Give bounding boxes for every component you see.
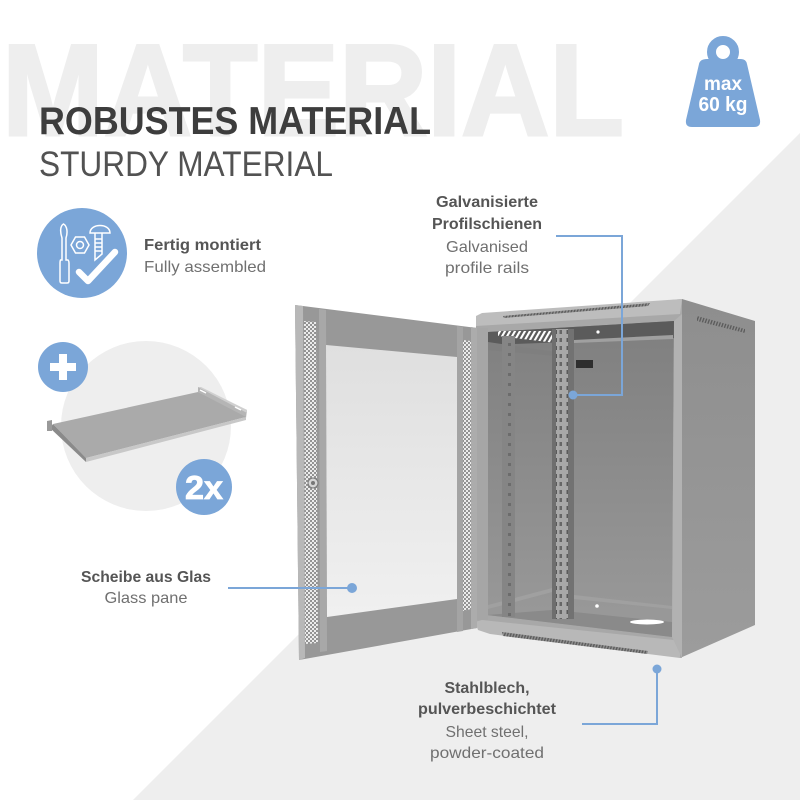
glass pane	[326, 345, 457, 617]
icon: weight max 60 kg	[686, 40, 760, 127]
icon: screwdriver	[60, 224, 69, 283]
background diagonal	[133, 133, 800, 800]
callout: profile rails	[432, 194, 622, 400]
heading english: STURDY MATERIAL	[39, 145, 333, 184]
callout: glass pane	[81, 569, 357, 607]
cabinet photo	[295, 299, 755, 660]
icon: weight max 60 kg: max	[704, 74, 742, 95]
cabinet front frame	[476, 299, 682, 658]
heading german: ROBUSTES MATERIAL	[39, 100, 431, 143]
backdrop circle	[61, 341, 231, 511]
cable clip	[576, 360, 593, 368]
callout text: Sheet steel,	[446, 724, 528, 741]
floor cut-out	[630, 620, 664, 624]
icon: weight max 60 kg: 60 kg	[698, 94, 748, 116]
bottom cap	[475, 620, 680, 658]
rear ventilation slots	[498, 331, 556, 343]
door	[295, 305, 488, 660]
callout line	[228, 587, 352, 589]
cabinet side panel	[680, 299, 755, 658]
callout text: Glass pane	[104, 590, 188, 607]
door lock	[308, 478, 318, 488]
icon: fully assembled tools	[37, 208, 127, 298]
left perforation	[304, 321, 318, 644]
callout: sheet steel	[418, 664, 662, 762]
callout text	[432, 194, 542, 277]
callout text: Galvanisierte	[436, 194, 538, 211]
badge: 2x	[176, 459, 232, 515]
callout text: profile rails	[445, 260, 529, 277]
mounting holes	[595, 330, 600, 608]
callout text	[81, 569, 211, 607]
callout text: Scheibe aus Glas	[81, 569, 211, 586]
icon: plus badge	[38, 342, 88, 392]
side vent	[697, 316, 745, 333]
shelf accessory panel	[38, 341, 247, 515]
watermark word: MATERIAL	[2, 17, 624, 163]
interior top band	[488, 321, 674, 345]
text: fully assembled: Fertig montiert	[144, 237, 262, 254]
right perforation	[463, 340, 471, 611]
callout dot	[568, 390, 578, 400]
callout text: pulverbeschichtet	[418, 701, 557, 718]
callout dot	[652, 664, 662, 674]
callout text: Galvanised	[446, 239, 528, 256]
front frame right post	[672, 314, 682, 658]
icon: screw	[90, 226, 110, 260]
callout dot	[347, 583, 357, 593]
callout line	[582, 669, 657, 724]
title	[39, 100, 431, 184]
text: fully assembled: Fully assembled	[144, 259, 266, 276]
shelf drawing	[47, 387, 247, 462]
door hinge strip	[477, 328, 488, 620]
callout line	[556, 236, 622, 395]
top cap	[476, 299, 682, 326]
icon: nut	[71, 237, 89, 253]
callout text: Stahlblech,	[444, 680, 530, 697]
cabinet interior back wall	[487, 321, 674, 637]
interior floor	[487, 610, 672, 637]
callout text: Profilschienen	[432, 216, 542, 233]
rear rail	[502, 336, 515, 617]
text: fully assembled	[144, 237, 266, 276]
badge: 2x: 2x	[185, 469, 224, 506]
callout text	[418, 680, 557, 762]
rear crossbars	[488, 335, 673, 609]
icon: check mark	[79, 252, 115, 281]
callout text: powder-coated	[430, 745, 544, 762]
galvanised front rail	[552, 329, 574, 619]
